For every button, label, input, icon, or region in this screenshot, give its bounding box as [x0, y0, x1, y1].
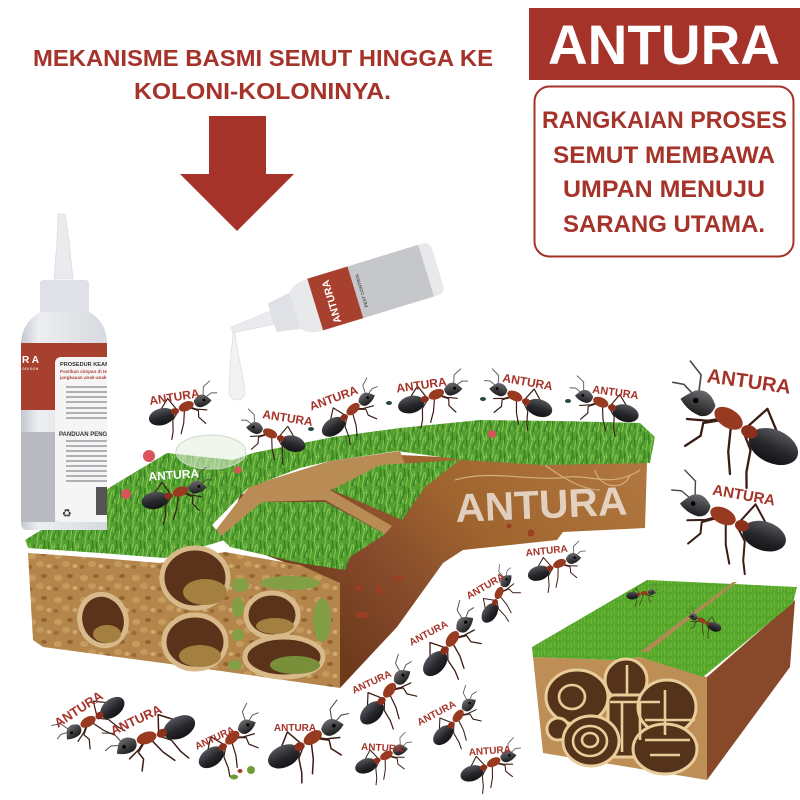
ant brand labels: ANTURA: [361, 742, 403, 755]
bottle: pouring: [224, 241, 445, 356]
qr code: [96, 487, 107, 515]
instruction text: ♻: [62, 507, 72, 520]
trail ant 5: [418, 683, 498, 760]
ant brand labels: ANTURA: [705, 365, 792, 399]
ant brand labels: ANTURA: [465, 572, 507, 602]
arrow: down: [180, 116, 294, 231]
trail ant 1: [522, 540, 593, 596]
callout: process description: RANGKAIAN PROSES: [542, 107, 787, 134]
label subtitle: ODISON: [22, 367, 39, 371]
large ants: [647, 358, 800, 582]
trail ant 9: [184, 701, 279, 787]
ant brand labels: ANTURA: [416, 699, 458, 729]
grass: upper field: [25, 420, 655, 558]
bottle: large: [21, 214, 134, 530]
bottle brand: ANTURA: [320, 278, 344, 324]
chambers: [72, 548, 323, 677]
trail ant 10: [97, 690, 210, 792]
callout: process description: UMPAN MENUJU: [563, 176, 765, 203]
ant brand labels: ANTURA: [262, 407, 314, 429]
tiny ants: [626, 584, 659, 607]
ant 3: [309, 375, 396, 454]
illustration: main soil block: [25, 420, 655, 688]
large ant 2: [656, 468, 798, 582]
tunnel trail in earth: [355, 524, 534, 618]
ant brand labels: ANTURA: [51, 688, 106, 730]
illustration: small soil block: [532, 580, 797, 780]
instruction text: [59, 362, 134, 520]
root lines: [455, 465, 640, 490]
chamber food deposits: [93, 579, 294, 667]
ant brand labels: ANTURA: [502, 371, 554, 393]
ant brand labels: [51, 365, 792, 758]
instruction text: jangkauan anak-anak: [59, 375, 107, 380]
soil side face: [225, 455, 647, 688]
ant brand labels: ANTURA: [408, 619, 450, 649]
grass top: [532, 580, 797, 677]
callout: process description: [534, 86, 794, 256]
front: [533, 657, 707, 780]
ant 4: [393, 368, 474, 431]
flowers: [121, 430, 496, 499]
ant 7: [138, 467, 217, 527]
ant brand labels: ANTURA: [711, 482, 777, 509]
ant brand labels: ANTURA: [148, 466, 200, 484]
instruction text: PANDUAN PENGGUNAAN: [59, 432, 134, 438]
ant brand labels: ANTURA: [592, 384, 639, 402]
label name: RA: [22, 355, 41, 366]
red label band: [21, 343, 107, 410]
trail ant 3: [404, 597, 502, 694]
soil front face: [28, 552, 340, 688]
callout: process description: SEMUT MEMBAWA: [553, 142, 775, 169]
ant brand labels: ANTURA: [193, 725, 236, 753]
heading: mechanism: KOLONI-KOLONINYA.: [134, 78, 391, 104]
ant trail: [48, 540, 593, 798]
instruction text: Pastikan simpan di tempat: [60, 369, 118, 374]
trail ant 8: [454, 736, 529, 798]
ant brand labels: ANTURA: [525, 544, 568, 559]
ant brand labels: ANTURA: [274, 723, 316, 734]
trail ant 2: [466, 561, 535, 634]
bait droplet on grass: [176, 435, 246, 469]
trail ant 11: [48, 678, 140, 768]
ant 5: [475, 368, 559, 435]
grass: front field: [220, 502, 385, 570]
droplet: [229, 332, 245, 400]
ant brand labels: ANTURA: [148, 386, 201, 408]
ant brand labels: ANTURA: [395, 375, 448, 395]
bottle sublabel: PEST CONTROL: [354, 273, 369, 308]
grass: back field: [332, 460, 460, 520]
ants on grass: [138, 368, 645, 527]
path: [640, 582, 737, 652]
bait crumbs: [230, 397, 571, 780]
callout: process description: SARANG UTAMA.: [563, 211, 765, 238]
watermark: ANTURA: [454, 480, 628, 531]
heading: mechanism: MEKANISME BASMI SEMUT HINGGA KE: [33, 45, 493, 71]
ant 1: [143, 380, 224, 443]
ant 2: [234, 408, 311, 469]
lower left grey label: [21, 432, 55, 522]
trail ant 6: [256, 698, 366, 792]
brand banner: ANTURA: [548, 13, 780, 76]
large ant 1: [647, 358, 800, 501]
dirt paths: [212, 451, 405, 540]
ant brand labels: ANTURA: [307, 383, 360, 413]
trail ant 7: [349, 731, 420, 789]
tunnels: [546, 659, 697, 774]
ant brand labels: ANTURA: [350, 669, 393, 697]
trail ant 4: [343, 651, 437, 742]
green bait pebbles: [228, 576, 331, 670]
instruction panel: [55, 357, 107, 522]
ant 6: [562, 375, 645, 440]
heading: mechanism: [33, 45, 493, 104]
ant brand labels: ANTURA: [108, 701, 165, 738]
side: [707, 600, 795, 780]
instruction text: PROSEDUR KEAMANAN: [60, 362, 126, 368]
ant brand labels: ANTURA: [468, 745, 511, 758]
